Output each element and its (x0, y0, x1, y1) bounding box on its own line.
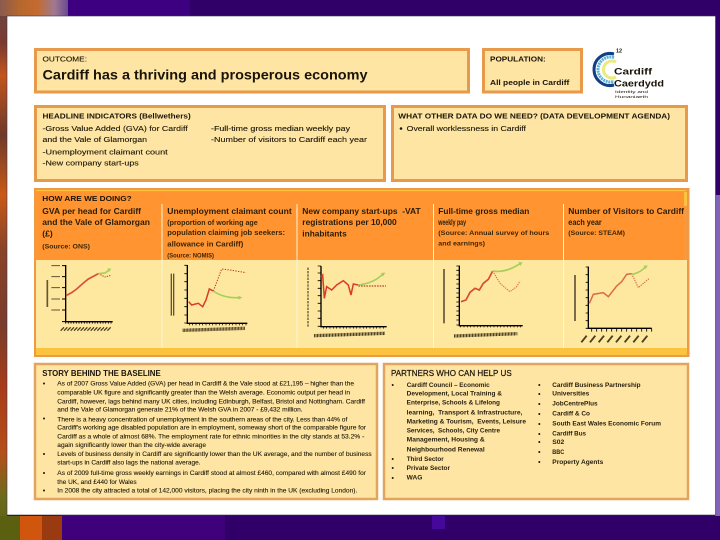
column heading: unemployment: Unemployment claimant count (167, 207, 292, 216)
panel: how are we doing (34, 188, 690, 357)
partners list right: BBC (552, 449, 565, 456)
headline list right: -Full-time gross median weekly pay (211, 126, 351, 133)
chart: visitors (575, 265, 652, 342)
column heading: visitors: (Source: STEAM) (568, 230, 625, 237)
chart: company start-ups (308, 266, 387, 336)
partners bullets (392, 384, 540, 479)
chart: unemployment claimant count (171, 265, 247, 330)
column heading: unemployment: (proportion of working age (167, 218, 258, 227)
story heading: STORY BEHIND THE BASELINE (42, 369, 161, 378)
outcome title: Cardiff has a thriving and prosperous economy (42, 66, 368, 82)
partners list left: Private Sector (407, 465, 451, 472)
partners list right: Cardiff Business Partnership (552, 382, 641, 389)
column heading: GVA: GVA per head for Cardiff (42, 207, 141, 216)
partners list left: Third Sector (407, 456, 444, 463)
column heading: company start-ups: registrations per 10,000 (302, 218, 397, 227)
partners list right (552, 382, 661, 466)
story text: In 2008 the city attracted a total of 142,000 visitors, placing the city ninth in the UK (excluding London). (57, 489, 358, 495)
agenda heading: WHAT OTHER DATA DO WE NEED? (DATA DEVELOPMENT AGENDA) (398, 112, 671, 121)
story text: start-ups in Cardiff also lags the national average. (57, 461, 201, 467)
headline list left: -Gross Value Added (GVA) for Cardiff (42, 126, 188, 133)
chart: weekly pay (444, 262, 523, 336)
chart: GVA per head (47, 265, 113, 331)
panel: outcome (36, 50, 468, 92)
partners list right: JobCentrePlus (552, 401, 598, 408)
partners list left: Management, Housing & (407, 437, 485, 444)
headline list left (42, 126, 188, 168)
column heading: visitors: Number of Visitors to Cardiff (568, 207, 684, 216)
partners list right: S02 (552, 439, 565, 446)
panel: headline indicators (36, 106, 384, 180)
column heading: GVA: (£) (42, 230, 53, 239)
story text: There is a heavy concentration of unemployment in the southern areas of the city. Less than 44% of (57, 417, 348, 423)
story text: Cardiff's working age disabled population are in employment, someway short of the comparable figure for (57, 426, 366, 432)
how are we doing heading: HOW ARE WE DOING? (42, 194, 132, 203)
story text: Cardiff, however, lags behind many UK cities, including Edinburgh, Belfast, Bristol and Nottingham. Cardiff (57, 400, 365, 406)
partners list left: learning, Transport & Infrastructure, (407, 409, 523, 416)
headline list left: and the Vale of Glamorgan (42, 137, 147, 144)
column heading: visitors: each year (568, 218, 602, 227)
story text: the UK, and £440 for Wales (57, 480, 137, 486)
column heading: unemployment: population claiming job seekers: (167, 228, 285, 237)
partners list left (407, 382, 526, 481)
column heading: GVA: (Source: ONS) (42, 243, 90, 250)
agenda item: Overall worklessness in Cardiff (407, 126, 526, 133)
headline list right: -Number of visitors to Cardiff each year (211, 137, 368, 144)
partners list left: Marketing & Tourism, Events, Leisure (407, 418, 526, 425)
column heading: company start-ups (302, 207, 421, 239)
column heading: unemployment: allowance in Cardiff) (167, 240, 244, 249)
partners list right: Cardiff Bus (552, 431, 586, 438)
partners list left: Cardiff Council – Economic (407, 382, 490, 389)
column heading: weekly pay: (Source: Annual survey of hours (438, 230, 550, 237)
icon: Cardiff Caerdydd logo: 12 (616, 48, 622, 54)
partners list right: Cardiff & Co (552, 411, 590, 418)
panel: story behind the baseline (35, 364, 377, 499)
column heading: GVA: and the Vale of Glamorgan (42, 218, 150, 227)
icon: Cardiff Caerdydd logo: Identity and (615, 90, 648, 94)
icon: Cardiff Caerdydd logo (594, 48, 664, 99)
icon: Cardiff Caerdydd logo: Cardiff (614, 66, 653, 76)
partners list right: Property Agents (552, 459, 604, 466)
icon: Cardiff Caerdydd logo: Hunaniaeth (615, 95, 648, 99)
story text (57, 382, 372, 495)
partners list left: Services, Schools, City Centre (407, 428, 500, 435)
story text: Levels of business density in Cardiff are significantly lower than the UK average, and the number of business (57, 452, 372, 458)
column heading: company start-ups: inhabitants (302, 230, 347, 239)
panel: data development agenda (392, 106, 686, 180)
panel: population (484, 50, 582, 92)
column heading: unemployment (167, 207, 292, 260)
headline heading: HEADLINE INDICATORS (Bellwethers) (42, 112, 191, 121)
outcome label: OUTCOME: (42, 57, 87, 64)
column heading: unemployment: (Source: NOMIS) (167, 253, 214, 260)
headline list left: -Unemployment claimant count (42, 150, 168, 157)
partners list right: Universities (552, 391, 590, 398)
story bullets (43, 382, 45, 492)
column heading: weekly pay (438, 207, 550, 248)
icon: Cardiff Caerdydd logo: Caerdydd (614, 78, 664, 88)
story text: again significantly lower than the city-wide average (57, 443, 207, 449)
story text: As of 2007 Gross Value Added (GVA) per head in Cardiff & the Vale stood at £21,195 – higher than the (57, 382, 355, 388)
headline list left: -New company start-ups (42, 161, 139, 168)
column heading: GVA (42, 207, 150, 250)
partners list right: South East Wales Economic Forum (552, 421, 661, 428)
column heading: weekly pay: and earnings) (438, 241, 485, 248)
panel: partners who can help us (384, 364, 688, 499)
partners list left: Neighbourhood Renewal (407, 446, 485, 453)
population value: All people in Cardiff (490, 78, 570, 87)
story text: As of 2009 full-time gross weekly earnings in Cardiff stood at almost £460, compared with almost £490 for (57, 471, 366, 477)
partners list left: Development, Local Training & (407, 391, 502, 398)
partners list left: Enterprise, Schools & Lifelong (407, 400, 500, 407)
partners list left: WAG (407, 474, 422, 481)
story text: comparable UK figure and significantly greater than the Welsh average. Economic output per head in (57, 391, 350, 397)
column heading: weekly pay: Full-time gross median (438, 207, 529, 216)
column heading: company start-ups: New company start-ups -VAT (302, 207, 421, 216)
headline list right (211, 126, 368, 144)
population label: POPULATION: (490, 55, 546, 64)
story text: Cardiff as a whole of almost 68%. The employment rate for ethnic minorities in the city stands at 53.2% - (57, 434, 364, 440)
column heading: weekly pay: weekly pay (438, 218, 466, 227)
partners heading: PARTNERS WHO CAN HELP US (391, 369, 512, 378)
story text: and the Vale of Glamorgan generate 21% of the Welsh GVA in 2007 - £9,432 million. (57, 408, 303, 414)
column heading: visitors (568, 207, 684, 237)
